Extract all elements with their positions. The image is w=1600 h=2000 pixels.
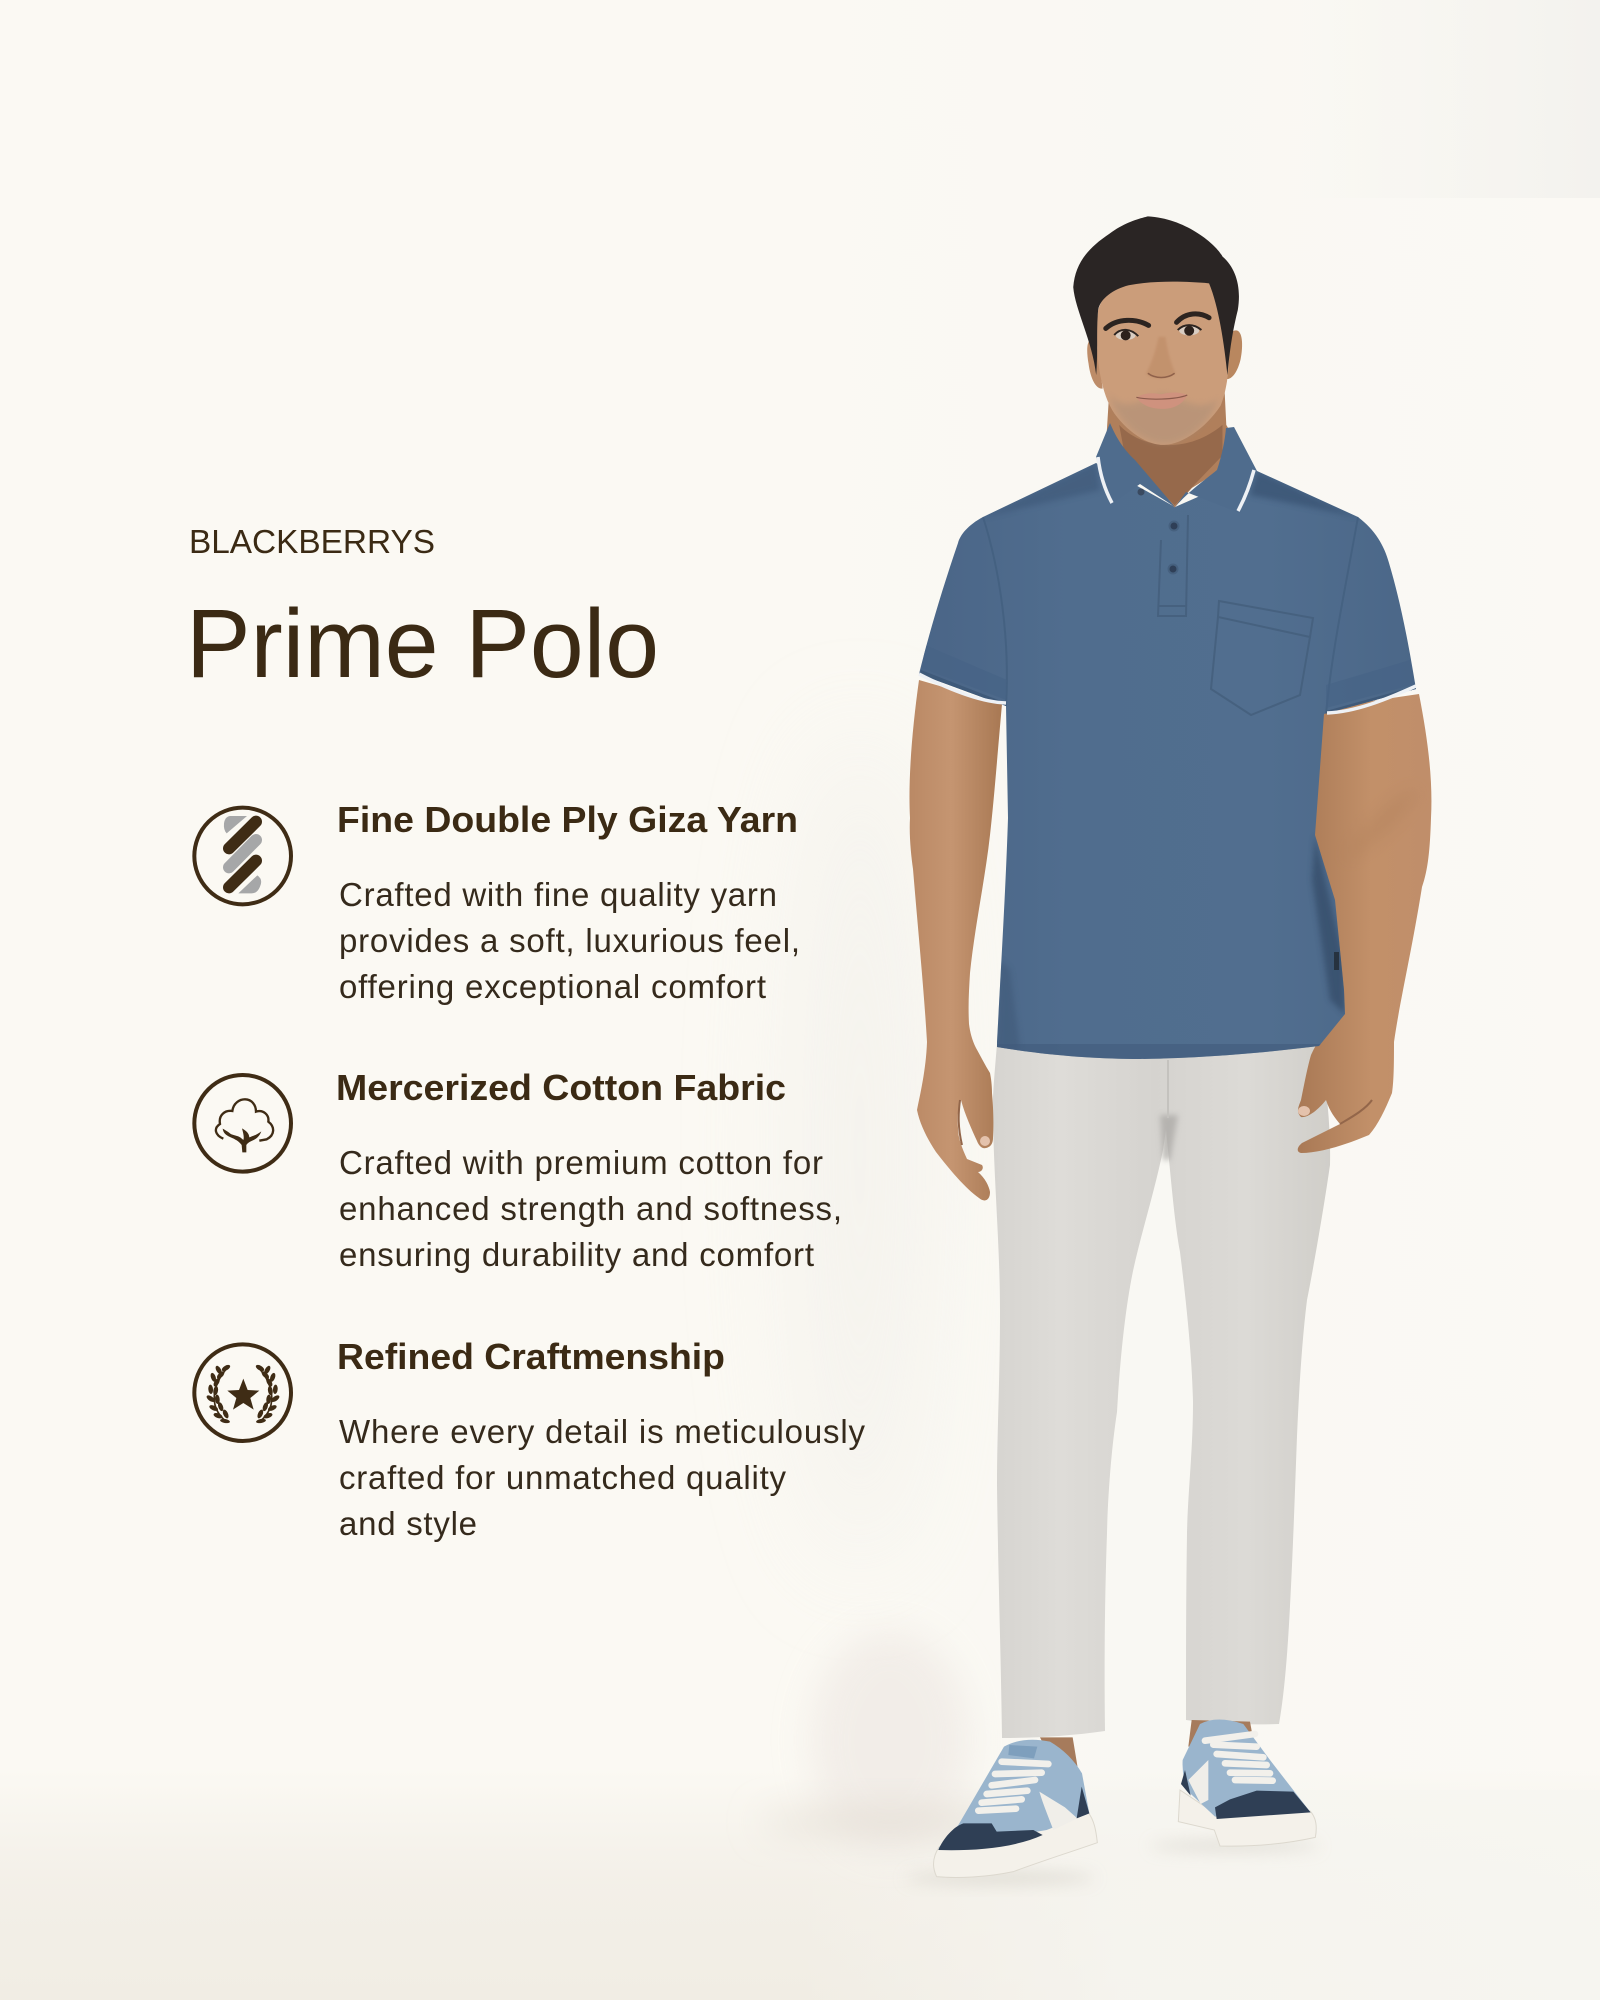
placket <box>1158 515 1188 616</box>
title: Prime Polo <box>186 589 659 698</box>
icon: yarn <box>194 808 291 904</box>
heading: cotton: Mercerized Cotton Fabric <box>336 1067 786 1108</box>
description: yarn: Crafted with fine quality yarn <box>339 876 777 913</box>
brand name: BLACKBERRYS <box>189 523 435 560</box>
pocket <box>1211 601 1313 715</box>
shoe shadows <box>905 1841 1320 1884</box>
description: cotton: enhanced strength and softness, <box>339 1190 842 1227</box>
left shoe <box>934 1737 1097 1878</box>
description: craftsmanship: Where every detail is meticulously <box>339 1413 866 1450</box>
description: yarn: provides a soft, luxurious feel, <box>339 922 800 959</box>
heading: yarn: Fine Double Ply Giza Yarn <box>337 799 798 840</box>
right arm <box>1298 694 1431 1153</box>
description: cotton: ensuring durability and comfort <box>339 1236 814 1273</box>
heading: craftsmanship: Refined Craftmenship <box>337 1336 725 1377</box>
description: cotton <box>339 1144 842 1273</box>
description: cotton: Crafted with premium cotton for <box>339 1144 823 1181</box>
model illustration <box>905 216 1431 1884</box>
care label <box>1334 952 1339 970</box>
description: craftsmanship: and style <box>339 1505 477 1542</box>
left arm <box>909 680 1002 1200</box>
description: yarn <box>339 876 800 1005</box>
description: yarn: offering exceptional comfort <box>339 968 766 1005</box>
feature: yarn <box>194 799 800 1005</box>
feature: cotton <box>194 1067 842 1273</box>
head and neck <box>1073 216 1244 508</box>
icon: laurel and star <box>194 1344 291 1441</box>
description: craftsmanship <box>339 1413 866 1542</box>
polo shirt <box>919 463 1418 1064</box>
feature: craftsmanship <box>194 1336 866 1542</box>
trousers <box>993 1044 1330 1738</box>
collar <box>1096 423 1257 513</box>
right shoe <box>1178 1719 1316 1846</box>
sleeve tipping <box>919 674 1416 713</box>
description: craftsmanship: crafted for unmatched quality <box>339 1459 786 1496</box>
icon: cotton <box>194 1075 291 1172</box>
